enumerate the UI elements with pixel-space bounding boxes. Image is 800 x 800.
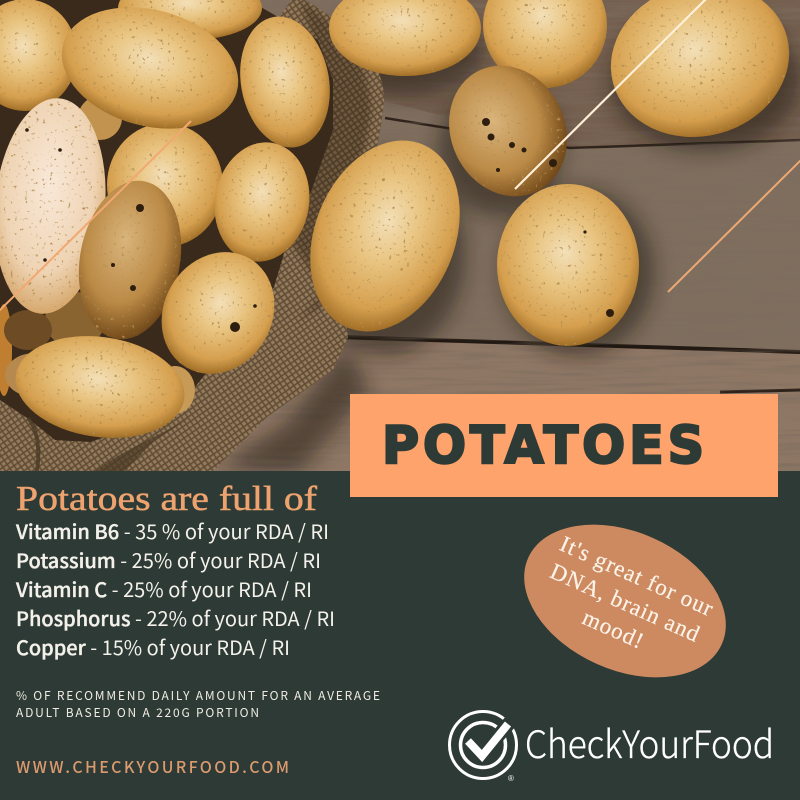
- logo wordmark: CheckYourFood: [525, 714, 774, 769]
- nutrient: vitamin B6: Vitamin B6 - 35 % of your RDA / RI: [15, 516, 329, 545]
- callout: health benefit ellipse: [500, 495, 750, 707]
- nutrient: potassium: Potassium - 25% of your RDA / RI: [16, 545, 321, 574]
- decorative line: orange right: [668, 160, 800, 292]
- shadows under potatoes: [215, 4, 800, 471]
- wooden boards: [0, 0, 800, 471]
- footnote: ADULT BASED ON A 220G PORTION: [16, 704, 259, 721]
- nutrient: vitamin C: Vitamin C - 25% of your RDA / RI: [15, 574, 312, 603]
- photo: potatoes in a sack on wooden boards: [0, 0, 800, 471]
- nutrient: phosphorus: Phosphorus - 22% of your RDA / RI: [16, 603, 335, 632]
- logo: CheckYourFood: [450, 712, 774, 783]
- callout: health benefit ellipse: mood!: [579, 605, 648, 654]
- burlap sack: [0, 0, 384, 471]
- title: POTATOES: POTATOES: [382, 416, 708, 476]
- footnote: [16, 687, 380, 721]
- callout: health benefit ellipse: DNA, brain and: [546, 559, 704, 647]
- title banner: [350, 394, 778, 497]
- website url: WWW.CHECKYOURFOOD.COM: [16, 754, 289, 778]
- nutrient: copper: Copper - 15% of your RDA / RI: [16, 632, 290, 661]
- nutrient list: [15, 516, 335, 661]
- footnote: % OF RECOMMEND DAILY AMOUNT FOR AN AVERAGE: [16, 687, 380, 704]
- decorative line: orange left: [0, 121, 191, 312]
- decorative line: white centre: [515, 0, 706, 189]
- callout: health benefit ellipse: It's great for our: [556, 531, 718, 621]
- heading: Potatoes are full of: Potatoes are full of: [16, 479, 317, 518]
- icon: check mark in circles: [450, 712, 516, 778]
- potatoes: [0, 0, 800, 471]
- registered mark: ®: [508, 774, 514, 783]
